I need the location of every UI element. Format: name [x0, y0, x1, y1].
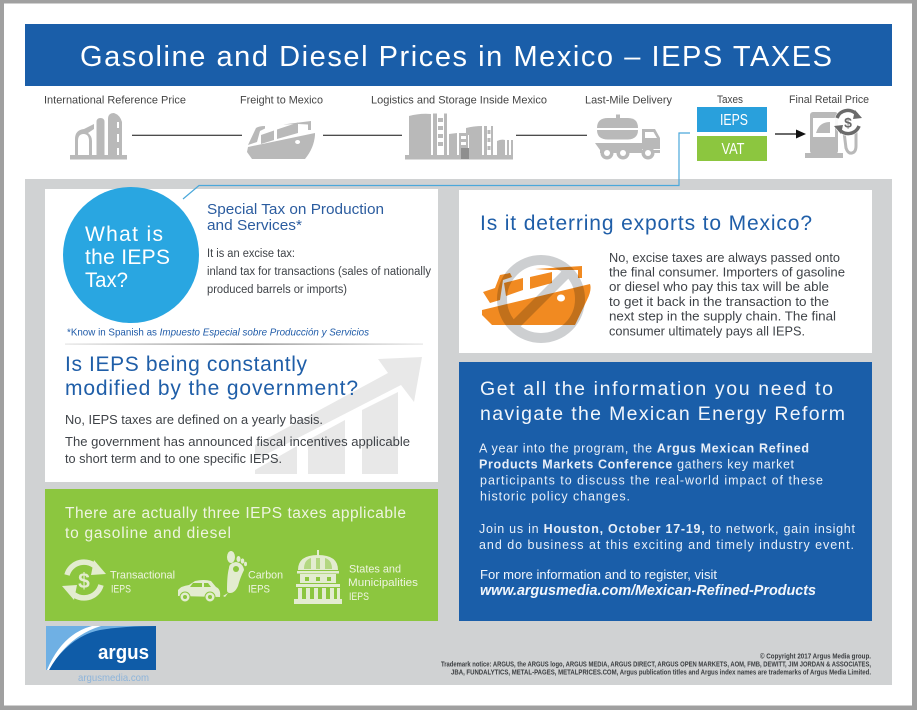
subheading: Special Tax on Production: [207, 201, 384, 218]
connector: IEPS tax to explanation: [183, 133, 690, 199]
icon: fuel pump: [805, 108, 862, 158]
subheading: and Services*: [207, 217, 302, 234]
link text: For more information and to register, visit: [480, 567, 717, 582]
supply chain labels: Taxes: [717, 94, 743, 106]
supply chain labels: Logistics and Storage Inside Mexico: [371, 94, 547, 106]
supply chain labels: [44, 94, 869, 106]
icon: capitol building: [294, 550, 342, 604]
connector line: storage to truck: [516, 134, 587, 136]
conference text: and do business at this exciting and timely industry event.: [479, 538, 854, 552]
link text: www.argusmedia.com/Mexican-Refined-Products: [480, 582, 816, 599]
heading: Get all the information you need to: [480, 378, 833, 400]
label: states and municipalities: [348, 564, 419, 603]
answer text: the final consumer. Importers of gasoline: [609, 266, 845, 280]
legal notice: [441, 652, 871, 676]
connector line: refinery to ship: [132, 134, 242, 136]
icon: refinery: [70, 113, 127, 160]
heading: There are actually three IEPS taxes applicable: [65, 505, 406, 522]
supply chain labels: Last-Mile Delivery: [585, 94, 672, 106]
panel: deterring exports: [459, 190, 872, 353]
link text: [480, 567, 816, 599]
answer text: The government has announced fiscal incentives applicable: [65, 435, 410, 449]
conference text: [479, 442, 856, 552]
watermark: rising chart arrow: [255, 357, 422, 474]
conference text: participants to discuss the real-world impact of these: [480, 474, 823, 488]
heading: is IEPS being modified: Is IEPS being constantly: [65, 353, 308, 376]
supply chain labels: Freight to Mexico: [240, 94, 323, 106]
supply chain labels: Final Retail Price: [789, 94, 869, 106]
heading: [480, 378, 845, 425]
circle heading: Tax?: [85, 269, 128, 292]
label: transactional: [110, 570, 175, 596]
heading: to gasoline and diesel: [65, 525, 231, 542]
taxes: IEPS box: [697, 107, 767, 132]
label: states and municipalities: IEPS: [349, 591, 369, 603]
label: states and municipalities: Municipalities: [348, 577, 419, 589]
heading: is IEPS being modified: [65, 353, 358, 400]
icon: transactional: [62, 560, 106, 600]
argus logo: argus: [98, 642, 149, 664]
definition text: It is an excise tax:: [207, 248, 295, 260]
conference text: historic policy changes.: [480, 490, 630, 504]
argus logo: [46, 626, 156, 684]
arrow: taxes to retail price: [775, 130, 806, 138]
definition text: inland tax for transactions (sales of nationally: [207, 266, 431, 278]
icon: fuel pump: $: [844, 114, 852, 130]
panel: three IEPS taxes: [45, 489, 438, 621]
heading: is IEPS being modified: modified by the government?: [65, 377, 358, 400]
answer text: to get it back in the transaction to the: [609, 295, 829, 309]
label: carbon: Carbon: [248, 570, 283, 582]
title banner: [25, 24, 892, 86]
taxes: VAT box: [697, 136, 767, 161]
answer text: No, IEPS taxes are defined on a yearly basis.: [65, 413, 323, 427]
answer text: No, excise taxes are always passed onto: [609, 251, 840, 265]
label: transactional: Transactional: [110, 570, 175, 582]
icon: logistics and storage: [405, 114, 513, 160]
label: carbon: [248, 570, 283, 596]
conference text: A year into the program, the Argus Mexican Refined: [479, 442, 809, 456]
icon: car and footprint: [178, 551, 247, 602]
main grey panel: [25, 179, 892, 685]
definition text: [207, 248, 431, 296]
label: transactional: IEPS: [111, 584, 131, 596]
icon: ship: [247, 121, 315, 159]
icon: tanker truck: [595, 114, 660, 160]
taxes: VAT box: VAT: [722, 141, 745, 158]
heading: [65, 505, 406, 542]
panel: what is the IEPS tax: [45, 187, 438, 482]
circle heading: the IEPS: [85, 246, 170, 269]
taxes: IEPS box: IEPS: [720, 112, 748, 129]
panel: conference promo: [459, 362, 872, 621]
connector line: ship to storage: [323, 134, 402, 136]
label: carbon: IEPS: [248, 584, 270, 596]
answer text: to short term and to one specific IEPS.: [65, 452, 282, 466]
title banner: Gasoline and Diesel Prices in Mexico – IEPS TAXES: [80, 41, 832, 73]
subheading: [207, 201, 384, 234]
legal notice: © Copyright 2017 Argus Media group.: [760, 652, 871, 660]
conference text: Products Markets Conference gathers key market: [479, 458, 795, 472]
icon: ship with prohibition sign: [482, 260, 591, 338]
circle heading: [63, 187, 199, 323]
icon: transactional: $: [78, 570, 90, 593]
answer text: [65, 413, 410, 466]
answer text: [609, 251, 845, 338]
answer text: next step in the supply chain. The final: [609, 310, 836, 324]
circle heading: What is: [85, 223, 163, 246]
label: states and municipalities: States and: [349, 564, 401, 576]
answer text: or diesel who pay this tax will be able: [609, 280, 829, 294]
answer text: consumer ultimately pays all IEPS.: [609, 324, 805, 338]
supply chain labels: International Reference Price: [44, 94, 186, 106]
definition text: produced barrels or imports): [207, 284, 347, 296]
heading: navigate the Mexican Energy Reform: [480, 403, 845, 425]
argus logo: argusmedia.com: [78, 672, 149, 684]
heading: Is it deterring exports to Mexico?: [480, 212, 812, 235]
conference text: Join us in Houston, October 17-19, to network, gain insight: [479, 522, 856, 536]
footnote: *Know in Spanish as Impuesto Especial sobre Producción y Servicios: [67, 326, 370, 338]
